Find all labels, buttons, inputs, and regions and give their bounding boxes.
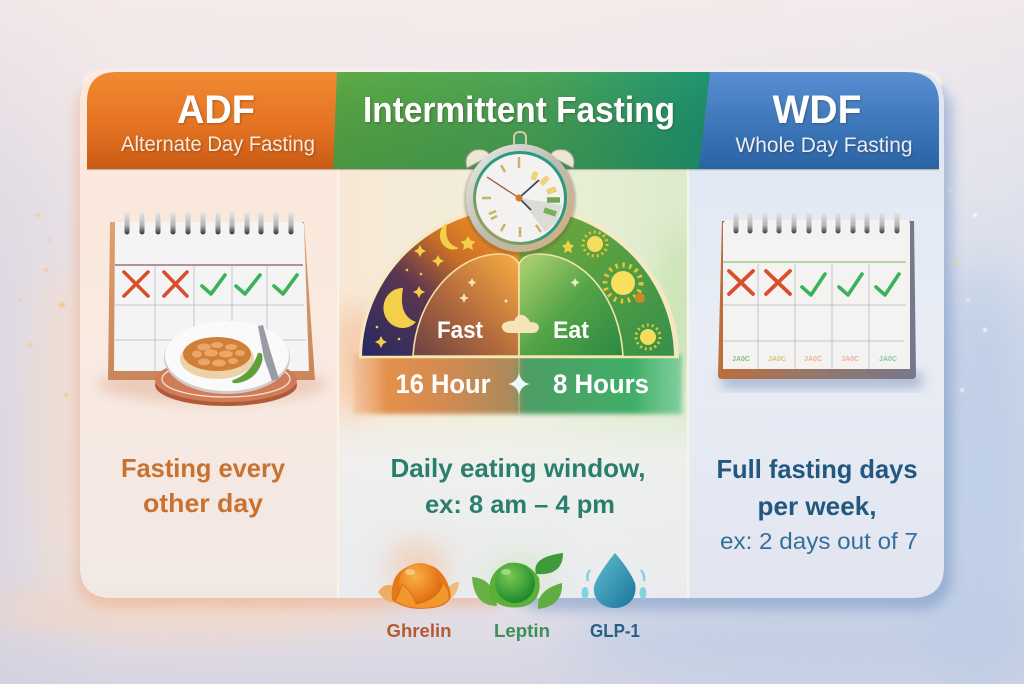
icon: calendar bbox=[718, 212, 922, 388]
panel dividers bbox=[338, 169, 688, 598]
icon: green checks bbox=[202, 275, 297, 294]
ADF heading bbox=[121, 88, 315, 156]
bottom band: hours bbox=[354, 354, 682, 414]
ADF description: other day bbox=[143, 488, 264, 518]
icon: green checks bbox=[802, 274, 899, 295]
center description: ex: 8 am – 4 pm bbox=[425, 491, 615, 519]
header: ADF band bbox=[87, 72, 340, 169]
icon: red crosses bbox=[729, 271, 790, 294]
WDF description: Full fasting days bbox=[716, 454, 918, 484]
ADF description bbox=[121, 453, 286, 518]
header: center band bbox=[333, 72, 710, 169]
ADF heading: Alternate Day Fasting bbox=[121, 133, 315, 156]
WDF heading: Whole Day Fasting bbox=[736, 134, 912, 157]
card bbox=[80, 72, 944, 598]
icon: calendar with plate bbox=[97, 213, 327, 406]
ADF description: Fasting every bbox=[121, 453, 286, 483]
WDF description bbox=[716, 454, 918, 554]
segment: fast bbox=[413, 254, 519, 356]
label: 8 hours: 8 Hours bbox=[553, 369, 649, 399]
icon: water drop bbox=[582, 553, 646, 608]
icon: ghrelin bbox=[378, 563, 459, 609]
hormone labels bbox=[386, 621, 640, 641]
calendar small labels: JA0C bbox=[841, 356, 859, 363]
icon: red crosses bbox=[124, 272, 187, 296]
panel: WDF bbox=[689, 72, 944, 598]
hormone labels: Ghrelin bbox=[386, 621, 452, 641]
main title: Intermittent Fasting bbox=[363, 89, 675, 130]
WDF heading: WDF bbox=[772, 88, 862, 132]
header: WDF band bbox=[697, 72, 939, 169]
WDF description: ex: 2 days out of 7 bbox=[720, 528, 918, 554]
icon: stopwatch bbox=[464, 132, 576, 256]
calendar small labels bbox=[732, 356, 897, 363]
calendar small labels: JA0C bbox=[804, 356, 822, 363]
ADF heading: ADF bbox=[177, 88, 255, 132]
icon: moons and stars bbox=[375, 223, 476, 348]
calendar small labels: JA0C bbox=[879, 356, 897, 363]
icon: plate of food bbox=[155, 321, 297, 406]
icon: leptin bbox=[472, 553, 563, 609]
center description: Daily eating window, bbox=[390, 453, 646, 483]
calendar small labels: JA0C bbox=[732, 356, 750, 363]
icon: sparkle bbox=[508, 372, 530, 396]
WDF heading bbox=[736, 88, 912, 157]
headers bbox=[87, 72, 939, 170]
segment: fast: Fast bbox=[437, 317, 483, 344]
segment: eat: Eat bbox=[553, 317, 589, 344]
card shadow bbox=[76, 69, 952, 610]
panel: ADF bbox=[80, 72, 337, 598]
segment: eat bbox=[519, 254, 623, 356]
label: 16 hour: 16 Hour bbox=[396, 369, 491, 399]
hormone labels: Leptin bbox=[494, 621, 550, 641]
icon: cloud bbox=[502, 315, 539, 333]
panel: intermittent fasting bbox=[331, 165, 702, 598]
hormone labels: GLP-1 bbox=[590, 621, 640, 641]
calendar small labels: JA0C bbox=[768, 356, 786, 363]
WDF description: per week, bbox=[758, 491, 876, 521]
chart: fast/eat dome bbox=[359, 204, 679, 358]
center description bbox=[390, 453, 646, 519]
icon: suns bbox=[562, 232, 660, 349]
